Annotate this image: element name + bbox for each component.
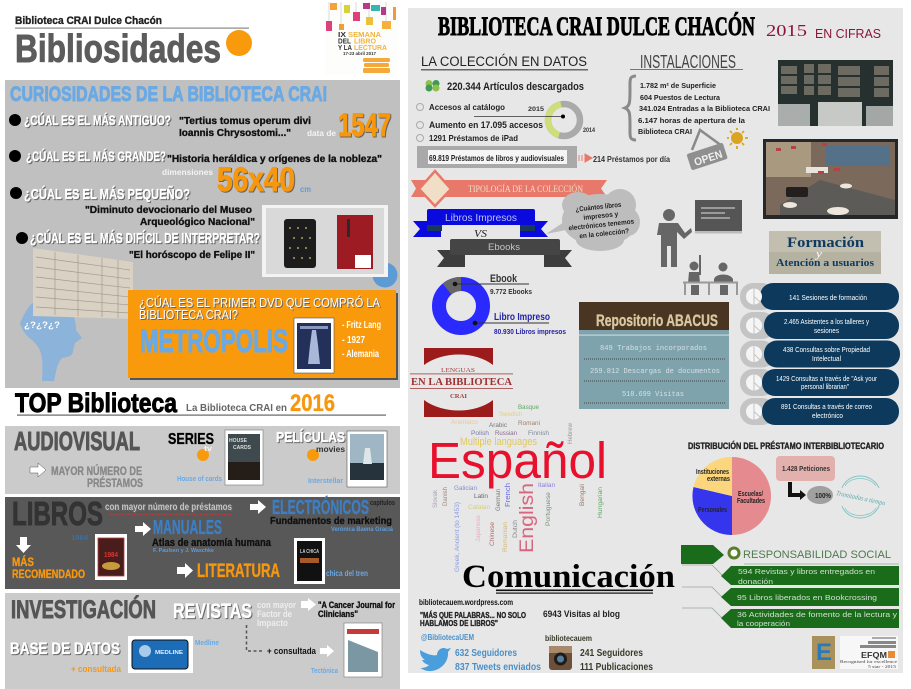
speech cloud: pregunta [546,189,640,251]
icon: head silhouette: ¿?¿?¿? [24,320,60,330]
row: bookcrossing: 95 Libros liberados en Bookcrossing [737,593,877,602]
revistas: + consultada [267,646,317,656]
series: House of cards [177,474,222,483]
chart: word cloud of languages: Catalan [468,504,490,511]
event logo: semana del libro: LIBRO [354,38,377,46]
banner: tipología de la colección [411,171,607,206]
icon: students at desks [683,255,738,295]
section: responsabilidad social [681,545,899,628]
section: comunicación: 241 Seguidores [580,648,643,659]
más recomendado: RECOMENDADO [12,567,85,581]
event logo: semana del libro: 17-23 abril 2017 [343,51,376,56]
event logo: semana del libro: SEMANA [348,32,381,39]
más recomendado: 1984 [71,535,88,542]
icon: teacher and blackboard [657,200,742,267]
item: más difícil de interpretar: "El horóscopo de Felipe II" [129,250,255,261]
row: asistentes: sesiones [814,328,839,335]
literatura: LA CHICA [300,549,319,555]
base de datos: + consultada [71,664,122,674]
chart: word cloud of languages: French [505,483,512,507]
base de datos: Medline [195,640,219,647]
item: más grande: dimensiones [162,168,214,177]
chart: word cloud of languages: Arabic [489,422,508,429]
subtitle: Biblioteca CRAI Dulce Chacón [15,15,162,27]
title: 2015 [766,21,807,40]
base de datos [10,636,219,674]
row: propiedad intelectual: 438 Consultas sobre Propiedad [783,347,870,354]
más recomendado: 1984 [104,552,118,559]
más recomendado [12,534,127,581]
chart: word cloud of languages: Russian [495,430,517,437]
section: la colección en datos [416,54,670,168]
banner: ebooks [437,239,572,267]
callout: préstamos: 69.819 Préstamos de libros y audiovisuales [429,153,564,163]
panel: repositorio Abacus: 259.812 Descargas de documentos [590,368,720,376]
title: Bibliosidades [15,28,221,71]
cover: Metropolis [294,318,334,373]
chart: donut accesos: 2014 [583,128,596,134]
item: más antiguo: "Tertius tomus operum divi [179,115,311,127]
section: comunicación: bibliotecauem.wordpress.com [419,598,513,607]
section: instalaciones: INSTALACIONES [640,52,736,72]
item: más antiguo: Ioannis Chrysostomi..." [179,127,291,139]
row: actividades: 36 Actividades de fomento de la lectura y [737,610,897,619]
chart: word cloud of languages: Basque [518,404,539,411]
callout: primer DVD: - Fritz Lang [342,320,381,331]
badge: EFQM: Recognised for excellence [840,659,897,664]
row: propiedad intelectual: Intelectual [812,356,841,363]
section: la colección en datos: 1291 Préstamos de iPad [429,133,518,143]
chart: word cloud of languages: Swedish [499,411,522,418]
series: HOUSE [229,438,248,444]
callout: primer DVD: ¿CÚAL ES EL PRIMER DVD QUE COMPRÓ LA [139,295,380,310]
section: instalaciones [625,52,770,170]
películas: Interstellar [308,476,343,485]
chart: pie: Personales [698,507,727,514]
chart: word cloud of languages: Latin [474,493,488,500]
title: Metropolis: METROPOLIS [140,323,288,359]
electrónicos: capítulos [370,500,395,507]
chart: pie [692,457,771,535]
section: comunicación: "MÁS QUE PALABRAS... NO SOLO [420,610,526,620]
event logo: semana del libro: Y LA [338,45,352,52]
item: más pequeño: Arqueológico Nacional" [140,216,255,228]
row: correo electrónico: 891 Consultas a través de correo [781,404,872,411]
item: más antiguo: ¿CÚAL ES EL MÁS ANTIGUO? [24,111,171,128]
heading: TOP Biblioteca: TOP Biblioteca [15,388,178,418]
panel: curiosidades [5,80,400,388]
panel: audiovisual: AUDIOVISUAL [14,426,140,456]
section: comunicación: Comunicación [462,559,675,595]
base de datos: MEDLINE [155,650,184,656]
section: comunicación [419,559,675,673]
callout: primer DVD: - 1927 [342,335,365,346]
manuales: F. Paulsen y J. Waschke [153,548,214,554]
series [168,430,263,485]
chart: pie: Instituciones [696,469,729,476]
revistas: con mayor [257,600,296,610]
literatura: chica del tren [326,569,368,578]
event logo: semana del libro [325,2,398,75]
row: ask your personal librarian: 1429 Consultas a través de "Ask your [776,376,878,383]
photo: estanterías [778,60,893,126]
item: más grande [9,147,382,199]
item: más pequeño: ¿CÚAL ES EL MÁS PEQUEÑO? [24,185,190,203]
más recomendado: MÁS [12,554,34,569]
series: SERIES [168,431,214,448]
badge: lenguas en la biblioteca [410,348,513,417]
panel: libros [5,495,400,589]
heading: TOP Biblioteca [15,388,386,418]
event logo: semana del libro: IX [338,32,346,39]
badge: 100% [807,486,833,504]
icon: brace [625,76,636,140]
series: tv [204,446,212,453]
event logo: semana del libro: LECTURA [354,45,387,52]
badge: EFQM [840,636,898,669]
chart: word cloud of languages: Galician [454,485,477,492]
item: más antiguo: 1547 [338,107,391,143]
chart: word cloud of languages: Hebrew [567,423,574,444]
heading: TOP Biblioteca: La Biblioteca CRAI en [186,403,287,414]
image: manuscrito horóscopo [33,248,133,319]
panel: repositorio Abacus: 518.699 Visitas [622,391,684,399]
chart: word cloud of languages: Romanian [502,522,509,552]
panel: investigación [5,593,400,689]
revistas: Tectónica [311,668,338,675]
section: instalaciones: 1.782 m² de Superficie [640,81,716,90]
chart: word cloud of languages: German [495,489,502,511]
section: la colección en datos: Aumento en 17.095 accesos [429,120,543,130]
item: más grande: cm [300,185,311,194]
banner: tipología de la colección: TIPOLOGÍA DE LA COLECCIÓN [468,184,583,194]
chart: word cloud of languages: Slovak [432,489,439,508]
banner: libros impresos: Libros Impresos [445,213,517,224]
callout: peticiones: 1.428 Peticiones [782,466,830,473]
chart: donut ebook vs libro impreso: 80.930 Libros impresos [494,329,566,336]
callout: primer DVD [128,290,398,380]
item: más grande: "Historia heráldica y orígenes de la nobleza" [167,153,382,165]
stamp: tramitadas a tiempo [835,476,886,518]
section: préstamo interbibliotecario [688,440,886,535]
row: sesiones [740,283,899,310]
chart: word cloud of languages: Bengali [579,484,586,506]
callout: peticiones [776,456,835,481]
icon: sun [727,128,748,149]
chart: word cloud of languages: Romani [518,420,540,427]
row: donación: donación [738,577,773,586]
section: instalaciones: 6.147 horas de apertura de la [638,116,746,125]
chart: word cloud of languages: Portuguese [545,492,552,526]
chart: pie: Facultades [737,498,765,505]
row: ask your personal librarian: personal librarian" [801,384,849,391]
chart: pie: Escuelas/ [738,491,763,498]
electrónicos [250,495,395,533]
chart: donut ebook vs libro impreso: Ebook [490,273,518,285]
header: Bibliosidades [15,15,252,71]
section: la colección en datos: LA COLECCIÓN EN DATOS [421,54,587,69]
chart: word cloud of languages: Español [428,432,607,489]
callout: préstamos [417,146,577,168]
badge: EFQM: 5 star - 2015 [868,664,897,669]
películas: PELÍCULAS [276,429,345,446]
row: asistentes: 2.465 Asistentes a los talleres y [784,319,869,326]
badge: lenguas en la biblioteca: EN LA BIBLIOTECA [411,376,512,388]
arrow: L [788,482,806,500]
section: comunicación: bibliotecauem [545,634,592,643]
item: más antiguo: data de [307,129,337,138]
label: vs: VS [474,228,488,240]
title: EN CIFRAS [815,26,881,41]
icon: instagram [549,646,572,670]
revistas: REVISTAS [173,600,252,623]
chart: pie: externas [707,476,730,483]
películas: movies [316,445,346,454]
heading: formación y atención a usuarios [769,231,881,274]
chart: word cloud of languages: Danish [442,487,449,506]
row: asistentes [740,312,899,339]
revistas: "A Cancer Journal for [318,600,395,610]
icon: arrow [30,463,46,477]
speech cloud: pregunta: en la colección? [579,228,630,240]
section: comunicación: 632 Seguidores [455,648,517,659]
chart: word cloud of languages: Polish [471,430,489,437]
chart: donut ebook vs libro impreso [439,273,566,336]
section: comunicación: @BibliotecaUEM [421,633,474,642]
item: más grande: ¿CÚAL ES EL MÁS GRANDE? [26,147,166,164]
banner: ebooks: Ebooks [488,242,520,253]
series: CARDS [233,445,252,451]
item: más pequeño: "Diminuto devocionario del Museo [85,204,252,216]
banner: libros impresos [413,209,548,237]
revistas: Impacto [257,618,288,628]
panel: repositorio Abacus: Repositorio ABACUS [596,311,718,330]
chart: donut accesos [474,104,596,136]
section: responsabilidad social: RESPONSABILIDAD SOCIAL [743,549,891,561]
manuales: MANUALES [153,517,222,539]
heading: TOP Biblioteca: 2016 [290,390,335,417]
panel: repositorio Abacus: 849 Trabajos incorporados [600,345,707,353]
heading: formación y atención a usuarios: Atención a usuarios [776,258,874,269]
section: comunicación: HABLAMOS DE LIBROS" [420,618,498,628]
section: instalaciones: 341.024 Entradas a la Biblioteca CRAI [639,104,770,113]
row: sesiones: 141 Sesiones de formación [789,295,867,302]
chart: word cloud of languages [428,404,607,572]
photo: diminuto devocionario [262,205,388,277]
heading: curiosidades: CURIOSIDADES DE LA BIBLIOTECA CRAI [10,83,327,106]
row: actividades [721,609,899,628]
chart: word cloud of languages: Multiple languages [460,436,537,448]
section: la colección en datos: 214 Préstamos por día [593,155,670,164]
panel: audiovisual: PRÉSTAMOS [87,475,143,490]
icon: arrow [579,154,592,162]
section: comunicación: 837 Tweets enviados [455,662,541,673]
electrónicos: ELECTRÓNICOS [272,495,369,519]
section: la colección en datos: 220.344 Artículos descargados [447,81,584,93]
speech cloud: pregunta: impresos y [583,211,619,222]
chart: donut ebook vs libro impreso: Libro Impreso [494,312,550,323]
literatura: LITERATURA [197,561,280,582]
chart: donut ebook vs libro impreso: 9.772 Ebooks [490,289,532,296]
row: correo electrónico: electrónico [812,413,843,420]
item: más grande: 56x40 [217,161,295,199]
section: la colección en datos: Accesos al catálogo [429,102,505,112]
badge: EFQM: EFQM [861,651,887,660]
row: donación [721,566,899,586]
panel: libros: con mayor número de préstamos [105,502,232,513]
stamp: tramitadas a tiempo: Tramitadas a tiempo [835,489,886,507]
revistas: Factor de [257,609,292,619]
chart: word cloud of languages: English [517,483,538,553]
icon: head silhouette [20,303,82,381]
heading: formación y atención a usuarios: y [815,249,823,260]
badge: E excellence: E [816,639,832,666]
chart: donut accesos: 2015 [528,107,545,113]
chart: word cloud of languages: Dutch [512,520,519,538]
heading: formación y atención a usuarios: Formación [787,235,865,251]
icon: orange dot [226,30,252,56]
chart: word cloud of languages: Aramaico [451,419,478,426]
row: bookcrossing [721,588,899,606]
panel: investigación: INVESTIGACIÓN [11,594,156,624]
electrónicos: Fundamentos de marketing [270,515,392,527]
event logo: semana del libro: DEL [338,38,352,46]
literatura [177,538,368,584]
panel: audiovisual [5,426,400,494]
badge: lenguas en la biblioteca: CRAI [450,393,467,400]
section: comunicación: 6943 Visitas al blog [543,609,620,619]
chart: word cloud of languages: Japanese [475,515,482,542]
row: correo electrónico [740,398,899,425]
section: comunicación: 111 Publicaciones [580,662,653,673]
speech cloud: pregunta: ¿Cuántos libros [575,202,622,214]
panel: repositorio Abacus [579,302,729,409]
callout: primer DVD: BIBLIOTECA CRAI? [139,307,238,322]
chart: word cloud of languages: Chinese [489,522,496,546]
chart: word cloud of languages: Finnish [528,430,549,437]
speech cloud: pregunta: electrónicos tenemos [568,219,635,232]
icon: open sign [686,130,728,170]
section: instalaciones: 604 Puestos de Lectura [640,93,721,102]
chart: word cloud of languages: Hungarian [597,487,604,518]
item: más difícil de interpretar [16,229,260,261]
badge: 100%: 100% [815,493,832,500]
right column: Biblioteca en cifras [408,8,903,673]
icon: blue dot [372,262,398,288]
row: donación: 594 Revistas y libros entregados en [738,567,875,576]
item: más difícil de interpretar: ¿CÚAL ES EL MÁS DIFÍCIL DE INTERPRETAR? [30,229,260,247]
electrónicos: Verónica Baena Graciá [331,526,393,533]
badge: lenguas en la biblioteca: LENGUAS [441,367,475,374]
base de datos: BASE DE DATOS [10,639,120,658]
row: propiedad intelectual [740,340,900,368]
panel: libros: LIBROS [12,495,103,532]
callout: primer DVD: - Alemania [342,349,379,360]
left column: Bibliosidades [5,2,400,689]
row: actividades: la cooperación [737,619,790,628]
title: BIBLIOTECA CRAI DULCE CHACÓN [438,12,755,41]
revistas [173,598,395,677]
chart: word cloud of languages: Greek, Ancient (to 1453) [454,502,461,572]
revistas: Clinicians" [318,609,358,619]
badge: E excellence [812,636,835,669]
item: más antiguo [9,107,391,143]
icon: twitter bird [420,648,451,671]
chart: word cloud of languages: Italian [538,482,555,489]
panel: audiovisual: MAYOR NÚMERO DE [51,463,142,478]
list: formación rows [740,283,900,425]
manuales: Atlas de anatomía humana [152,537,272,549]
icon: green circles [426,80,440,92]
item: más pequeño [10,185,255,228]
row: ask your personal librarian [740,369,899,396]
section: instalaciones: Biblioteca CRAI [638,127,692,136]
photo: sala de lectura [763,139,898,219]
manuales [135,517,272,554]
películas [276,429,387,487]
icon: open sign: OPEN [693,148,724,169]
